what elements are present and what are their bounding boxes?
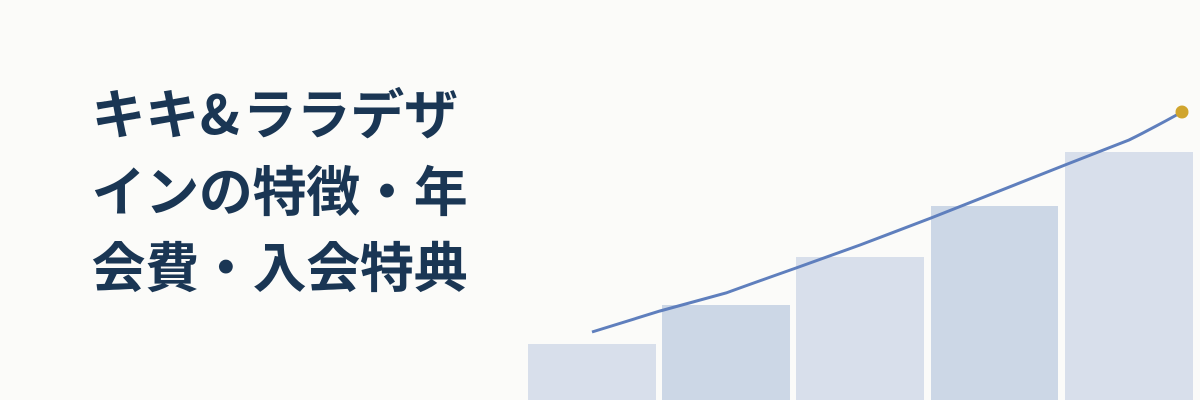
bar 2 <box>662 305 790 400</box>
trend line <box>592 112 1182 332</box>
end point marker <box>1176 106 1188 118</box>
bar 3 <box>796 257 924 400</box>
bar 5 <box>1065 152 1193 400</box>
bar 1 <box>528 344 656 400</box>
title: 会費・入会特典 <box>92 224 467 303</box>
title: キキ&ララデザ <box>92 71 458 150</box>
title <box>92 71 467 303</box>
title: インの特徴・年 <box>92 148 467 226</box>
bar 4 <box>931 206 1058 400</box>
